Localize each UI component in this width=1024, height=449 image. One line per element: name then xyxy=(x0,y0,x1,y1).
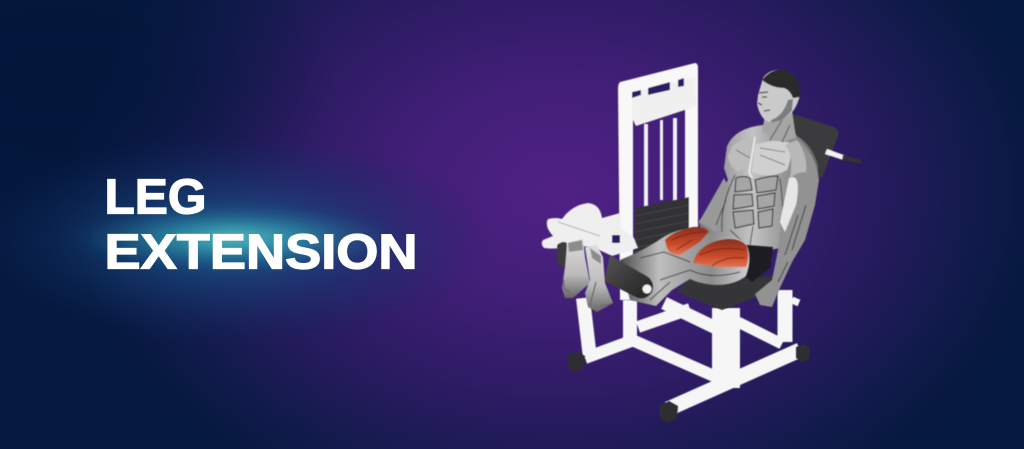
athlete: thighs xyxy=(620,227,750,306)
machine: weight tower xyxy=(618,63,698,300)
athlete: shorts xyxy=(722,243,773,282)
machine: leg roller xyxy=(604,255,653,298)
machine: weight stack xyxy=(635,197,689,265)
illustration: leg extension machine with athlete xyxy=(542,63,861,423)
muscle highlight: quadriceps near xyxy=(693,239,748,267)
title line: LEG: LEG xyxy=(104,170,206,224)
foot: near xyxy=(585,245,613,312)
athlete: torso xyxy=(698,120,819,307)
title line: EXTENSION: EXTENSION xyxy=(104,225,418,279)
machine: base frame xyxy=(583,290,800,409)
athlete: chest muscles xyxy=(728,137,756,172)
title xyxy=(104,170,418,279)
athlete: neck and head xyxy=(757,69,800,142)
machine: seat xyxy=(677,276,775,310)
machine: rubber feet xyxy=(568,344,810,423)
athlete: right arm xyxy=(755,138,819,307)
foot: far xyxy=(562,239,590,298)
machine: front roller support xyxy=(542,203,638,268)
athlete: feet xyxy=(562,239,613,312)
muscle highlight: quadriceps far xyxy=(665,227,709,255)
machine: back pad xyxy=(790,113,861,178)
athlete: abs xyxy=(733,176,778,228)
